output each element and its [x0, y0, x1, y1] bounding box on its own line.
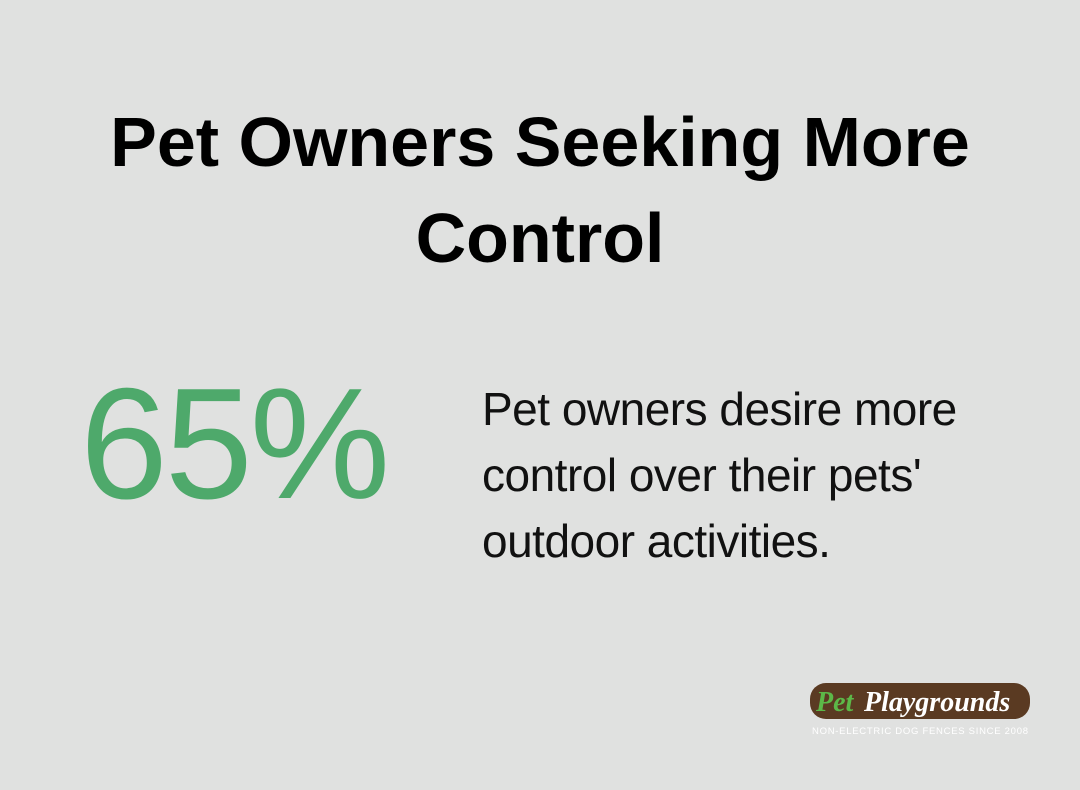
title: Pet Owners Seeking More: [110, 103, 970, 181]
title: [110, 103, 970, 277]
stat description: Pet owners desire more: [482, 383, 957, 435]
stat number: 65%: [80, 356, 387, 532]
title: Control: [416, 199, 664, 277]
stat description: control over their pets': [482, 449, 921, 501]
logo: NON-ELECTRIC DOG FENCES SINCE 2008: [812, 726, 1028, 737]
stat description: outdoor activities.: [482, 515, 830, 567]
logo: Pet: [815, 687, 855, 718]
logo: [810, 683, 1030, 737]
stat description: [482, 383, 957, 567]
logo: Playgrounds: [863, 687, 1010, 718]
